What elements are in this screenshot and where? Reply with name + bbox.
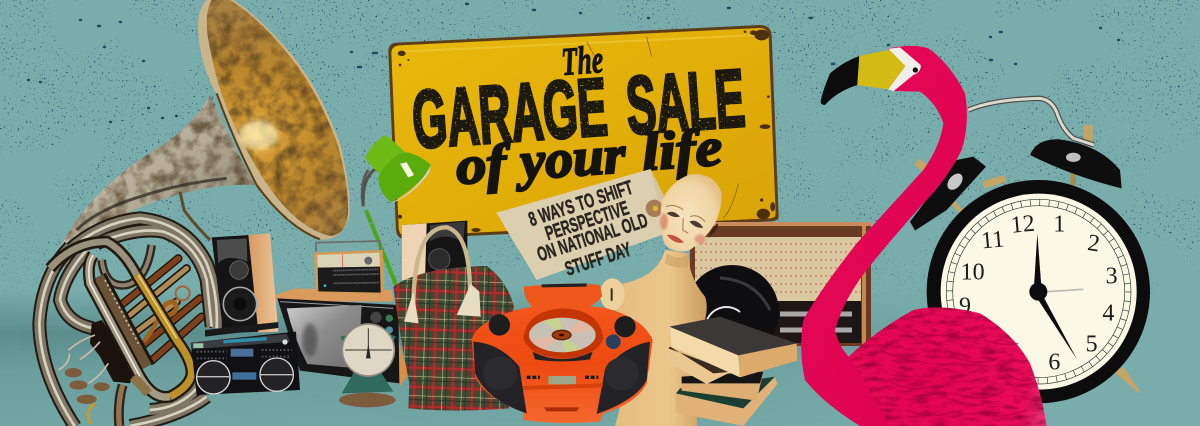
title: of your life: life: [640, 117, 724, 182]
clock numerals: 11: [980, 226, 1005, 254]
luggage tag: subtitle: [496, 169, 666, 281]
mannequin head: [660, 174, 722, 252]
valves: [123, 258, 202, 361]
title: Garage Sale: SALE: [623, 53, 748, 152]
compact disc: [529, 318, 596, 352]
beak: [821, 56, 859, 105]
clock numerals: 10: [961, 259, 985, 285]
big vintage radio: [690, 222, 871, 346]
clock numerals: 2: [1086, 230, 1101, 257]
clock numerals: 12: [1010, 211, 1036, 239]
title: of your life: your: [512, 124, 629, 192]
title: Garage Sale: GARAGE: [409, 62, 610, 166]
clock numerals: 4: [1102, 301, 1114, 327]
flamingo body: [847, 307, 1047, 426]
valve keys: [90, 320, 137, 383]
subtitle text: PERSPECTIVE: [543, 197, 632, 245]
clock numerals: 9: [959, 293, 971, 319]
subtitle text: 8 WAYS TO SHIFT: [526, 177, 636, 231]
pink flamingo: [801, 46, 1047, 426]
mannequin: [600, 174, 722, 426]
speakers: [473, 342, 527, 413]
clock bells and handle: [910, 98, 1140, 393]
clock case and face: [927, 180, 1150, 403]
clock numerals: 3: [1106, 263, 1118, 289]
clock numerals: [959, 211, 1118, 375]
clock numerals: 5: [1086, 332, 1098, 358]
clock hands: [1029, 233, 1083, 360]
horn tube: [50, 95, 255, 272]
subtitle text: STUFF DAY: [562, 239, 634, 281]
stack of books: [668, 317, 797, 426]
title: of your life: [454, 117, 724, 196]
lamp stem: [362, 170, 397, 287]
slide: [50, 242, 192, 397]
clock numerals: 1: [1053, 212, 1065, 238]
flamingo neck and head: [801, 46, 967, 426]
television: [276, 289, 408, 386]
speaker behind bag: [402, 221, 467, 280]
french horn: [39, 0, 408, 426]
plaid bag: [393, 227, 514, 410]
title: of your life: of: [454, 132, 514, 196]
alarm clock: [910, 98, 1150, 403]
subtitle text: ON NATIONAL OLD: [534, 210, 651, 266]
vinyl record: [685, 265, 779, 359]
horn coils: [39, 218, 217, 426]
minute track: [946, 199, 1131, 384]
center column: [98, 277, 147, 367]
display: [548, 376, 576, 384]
title: The: The: [560, 37, 605, 84]
weighing scale: [339, 324, 396, 407]
subtitle text: [526, 177, 651, 281]
small radio: [314, 218, 384, 295]
boombox: [191, 322, 300, 395]
orange CD boombox: [472, 283, 653, 423]
yellow metal sign: [388, 25, 779, 239]
green desk lamp shade: [363, 135, 431, 205]
clock numerals: 6: [1048, 349, 1060, 375]
torso: [600, 250, 707, 426]
horn bell: [198, 0, 350, 240]
speaker: [212, 233, 278, 333]
